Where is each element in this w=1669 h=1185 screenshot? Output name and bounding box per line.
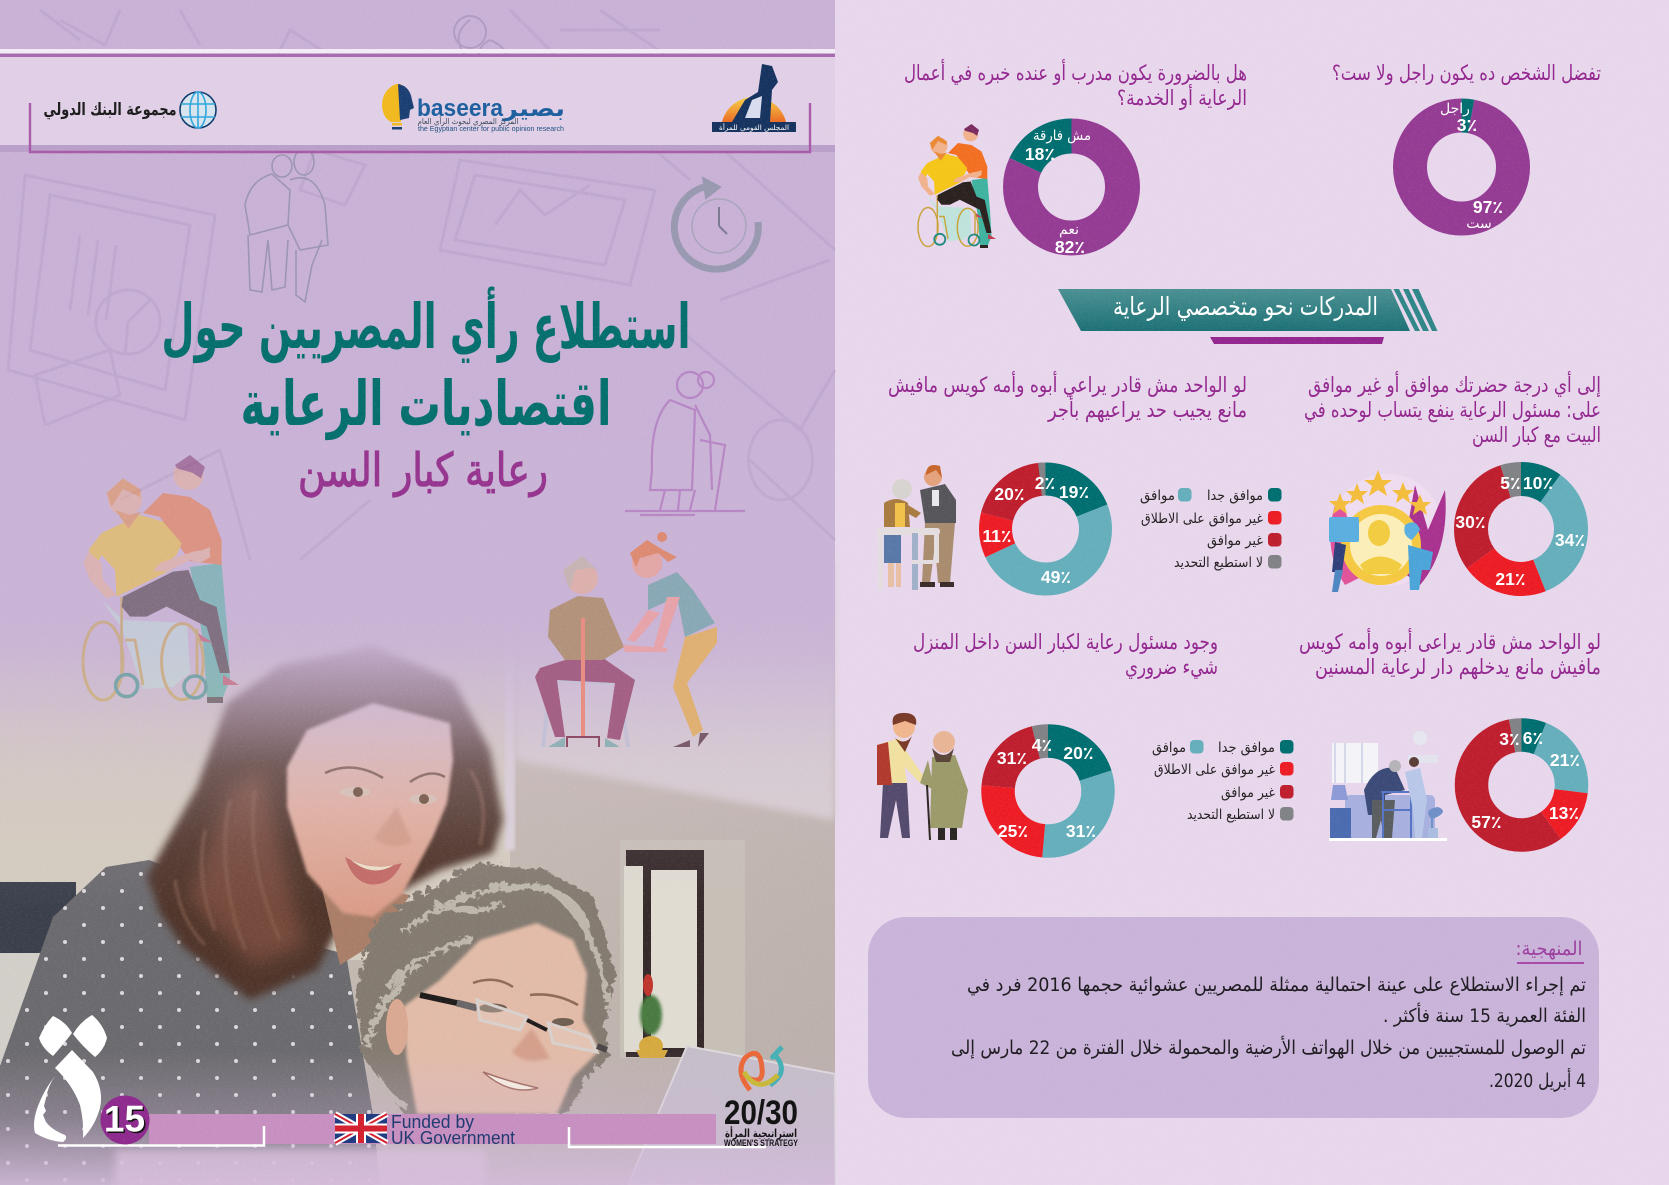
donut: home caregiver necessary: 31٪ <box>997 748 1027 768</box>
logo: World Bank Group <box>44 92 216 128</box>
title <box>162 286 690 498</box>
white bracket lines <box>58 1126 766 1147</box>
question: paid caregiver <box>888 371 1247 423</box>
illustration: nurse with walker <box>876 465 956 590</box>
donut: nursing home: 6٪ <box>1523 728 1543 748</box>
question: paid caregiver: مانع يجيب حد يراعيهم بأجر <box>1047 395 1247 423</box>
icon: globe <box>180 92 216 128</box>
donut: gender preference: ست <box>1466 216 1492 232</box>
background sketches <box>8 10 835 560</box>
logo: emblem with face silhouette <box>34 1015 107 1142</box>
header strip <box>0 49 835 152</box>
methodology text: تم إجراء الاستطلاع على عينة احتمالية ممثلة للمصريين عشوائية حجمها 2016 فرد في <box>967 974 1586 997</box>
question: caregiver alone at home: البيت مع كبار السن <box>1472 423 1601 447</box>
photo fade bottom <box>0 1050 835 1185</box>
funding bar: Funded by <box>391 1112 474 1132</box>
donut: paid caregiver: 2٪ <box>1035 473 1055 493</box>
line art: couple walking <box>245 149 328 302</box>
legend: first row chart <box>1140 488 1282 571</box>
icon: UK flag <box>335 1114 387 1143</box>
question: nursing home: مافيش مانع يدخلهم دار لرعاية المسنين <box>1315 655 1601 680</box>
question: training required: هل بالضرورة يكون مدرب أو عنده خبره في أعمال <box>904 59 1247 85</box>
funding bar: UK Government <box>391 1128 515 1148</box>
funding bar <box>149 1112 716 1148</box>
legend: second row chart <box>1152 740 1294 823</box>
question: home caregiver necessary <box>913 630 1218 679</box>
donut: caregiver alone at home: 21٪ <box>1495 569 1526 589</box>
donut: training required: 82٪ <box>1055 237 1085 257</box>
question: nursing home <box>1299 628 1601 680</box>
line art: people outline top <box>440 16 520 95</box>
title: استطلاع رأي المصريين حول <box>162 286 690 363</box>
logo: Women's Strategy 2030: استراتيجية المرأة <box>725 1126 797 1140</box>
logo: Baseera: المركز المصري لبحوث الرأي العام <box>418 116 518 126</box>
donut: training required: 18٪ <box>1025 144 1055 164</box>
photo: older woman <box>353 860 613 1125</box>
donut: caregiver alone at home: 34٪ <box>1555 530 1585 550</box>
face <box>287 703 453 917</box>
title: رعاية كبار السن <box>298 443 548 498</box>
legend: first row chart: لا استطيع التحديد <box>1174 555 1263 571</box>
donut: caregiver alone at home <box>1455 473 1585 589</box>
question: paid caregiver: لو الواحد مش قادر يراعي أبوه وأمه كويس مافيش <box>888 371 1247 397</box>
logo: Baseera: baseera <box>417 95 504 122</box>
donut: caregiver alone at home: 5٪ <box>1500 473 1521 493</box>
methodology text: الفئة العمرية 15 سنة فأكثر . <box>1383 1002 1586 1027</box>
donut: training required: نعم <box>1059 222 1079 238</box>
face <box>403 923 600 1114</box>
donut: paid caregiver: 11٪ <box>982 526 1012 546</box>
photo background wall <box>0 560 835 1185</box>
donut: gender preference: 3٪ <box>1457 115 1477 135</box>
illustration: seated elder and helper (faded) <box>535 532 717 747</box>
legend: first row chart: غير موافق <box>1207 533 1263 549</box>
donut: gender preference <box>1410 101 1513 232</box>
header frame <box>30 103 810 152</box>
methodology text: 4 أبريل 2020. <box>1489 1068 1586 1092</box>
legend: first row chart: غير موافق على الاطلاق <box>1141 511 1263 527</box>
donut: nursing home: 57٪ <box>1471 812 1502 832</box>
question: home caregiver necessary: شيء ضروري <box>1125 655 1218 679</box>
methodology text <box>951 974 1586 1092</box>
legend: second row chart: موافق جدا <box>1218 740 1275 756</box>
donut: home caregiver necessary: 25٪ <box>998 821 1028 841</box>
donut: home caregiver necessary: 4٪ <box>1032 735 1052 755</box>
logo: Baseera: بصير <box>502 97 565 122</box>
question: training required <box>904 59 1247 110</box>
page background: right panel <box>834 0 1669 1185</box>
donut: paid caregiver: 49٪ <box>1041 567 1071 587</box>
logo: National Council for Women <box>712 64 796 132</box>
donut: caregiver alone at home: 10٪ <box>1523 473 1553 493</box>
donut: home caregiver necessary: 31٪ <box>1066 821 1096 841</box>
question: training required: الرعاية أو الخدمة؟ <box>1117 84 1247 110</box>
neck <box>320 880 410 965</box>
question: gender preference: تفضل الشخص ده يكون راجل ولا ست؟ <box>1332 61 1601 85</box>
logo: Women's Strategy 2030: 20/30 <box>724 1094 798 1132</box>
legend: second row chart: غير موافق <box>1221 785 1275 801</box>
panel: methodology <box>868 917 1599 1118</box>
line art: old woman with walker <box>625 372 745 515</box>
grey curly hair <box>353 860 613 1125</box>
question: caregiver alone at home <box>1304 371 1601 447</box>
donut: paid caregiver: 20٪ <box>994 484 1025 504</box>
hair <box>147 645 503 1000</box>
donut: nursing home: 13٪ <box>1549 803 1579 823</box>
icon: clock with arrow <box>674 178 758 269</box>
donut: nursing home <box>1471 728 1580 835</box>
logo: World Bank Group: مجموعة البنك الدولي <box>44 100 176 120</box>
legend: second row chart: غير موافق على الاطلاق <box>1154 762 1275 778</box>
donut: home caregiver necessary <box>997 735 1098 841</box>
donut: gender preference: 97٪ <box>1473 197 1503 217</box>
donut: training required: مش فارقة <box>1033 128 1091 144</box>
donut: training required <box>1020 128 1122 257</box>
badge: 15: 15 <box>104 1098 145 1140</box>
donut: nursing home: 21٪ <box>1550 750 1580 770</box>
glasses <box>420 995 457 1003</box>
illustration: nurse helping elder in room <box>1329 731 1447 841</box>
logo: Baseera: the Egyptian center for public opinion research <box>418 124 564 133</box>
illustration: rating with stars <box>1329 470 1446 592</box>
photo: younger woman <box>0 645 503 1185</box>
title: اقتصاديات الرعاية <box>240 367 612 440</box>
section banner: المدركات نحو متخصصي الرعاية <box>1113 292 1378 321</box>
logo: Women's Strategy 2030: WOMEN'S STRATEGY <box>724 1138 798 1148</box>
section banner <box>1058 289 1438 331</box>
methodology heading: المنهجية: <box>1516 938 1582 960</box>
donut: paid caregiver: 19٪ <box>1059 482 1089 502</box>
donut: gender preference: راجل <box>1440 101 1470 117</box>
logo: National Council for Women: المجلس القومي للمرأة <box>719 123 789 132</box>
question: home caregiver necessary: وجود مسئول رعاية لكبار السن داخل المنزل <box>913 630 1218 654</box>
legend: second row chart: لا استطيع التحديد <box>1187 807 1275 823</box>
illustration: caregiver with man in wheelchair (faded) <box>83 455 239 703</box>
illustration: caregiver with wheelchair <box>918 124 996 248</box>
donut: nursing home: 3٪ <box>1499 729 1520 749</box>
badge: 15: 15 <box>105 1100 147 1141</box>
logo: Baseera <box>382 84 565 133</box>
photo: window and plant <box>620 840 745 1058</box>
illustration: young man helping old man <box>877 713 968 840</box>
photo: laptop lid <box>628 1046 835 1185</box>
question: nursing home: لو الواحد مش قادر يراعى أبوه وأمه كويس <box>1299 628 1601 654</box>
photo fade top <box>0 610 835 910</box>
legend: second row chart: موافق <box>1152 740 1186 756</box>
panel: left cover <box>0 0 835 1185</box>
logo: Women's Strategy 2030 <box>724 1047 798 1148</box>
sweater <box>0 860 380 1185</box>
legend: first row chart: موافق جدا <box>1207 488 1263 504</box>
methodology text: تم الوصول للمستجيبين من خلال الهواتف الأرضية والمحمولة خلال الفترة من 22 مارس إلى <box>951 1036 1586 1060</box>
banner underline <box>1210 337 1384 344</box>
donut: caregiver alone at home: 30٪ <box>1455 512 1486 532</box>
legend: first row chart: موافق <box>1140 488 1175 504</box>
donut: home caregiver necessary: 20٪ <box>1063 743 1094 763</box>
donut: paid caregiver <box>982 473 1096 587</box>
question: caregiver alone at home: إلى أي درجة حضرتك موافق أو غير موافق <box>1308 371 1601 398</box>
